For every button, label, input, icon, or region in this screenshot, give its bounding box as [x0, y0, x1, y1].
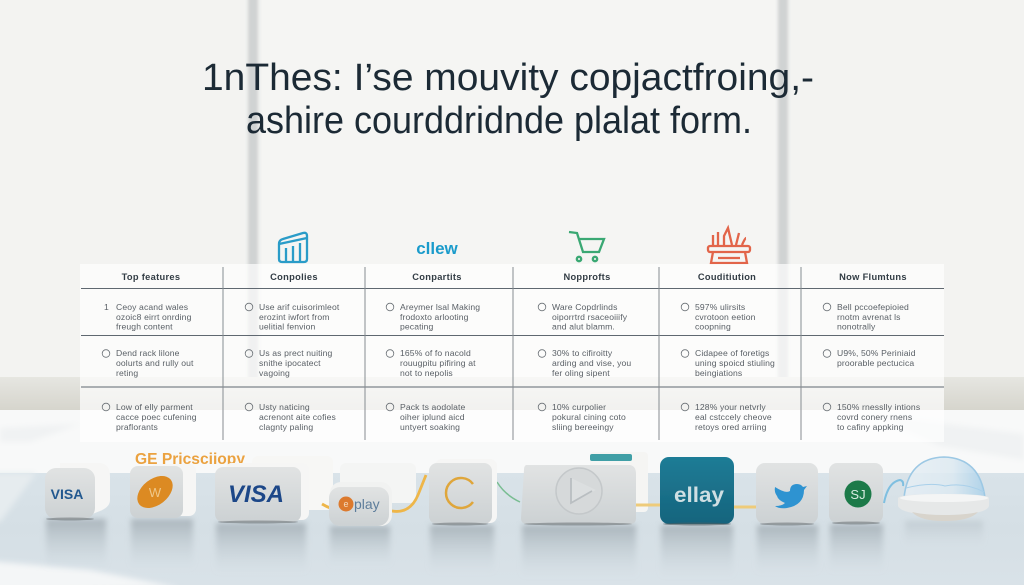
- title: 1nThes: I’se mouvity copjactfroing,-: [202, 57, 814, 99]
- column: Nopprofts: arding and vise, you: [552, 358, 631, 368]
- block: e play: [329, 482, 392, 526]
- title: [202, 57, 814, 142]
- column: Top features: Top features: [122, 272, 180, 282]
- column: Now Flumtuns: rnotm avrenat ls: [837, 312, 901, 322]
- column: Conpolies: vagoing: [259, 368, 290, 378]
- icon: glass dome on base: [898, 457, 989, 521]
- column: Couditiution: coopning: [695, 322, 731, 332]
- block: VISA small: VISA: [51, 486, 83, 502]
- title: ashire courddridnde plalat form.: [246, 100, 752, 142]
- column: Conpartits: frodoxto arlooting: [400, 312, 469, 322]
- icon: orange plant stand: [708, 228, 750, 263]
- column: Couditiution: eal cstccely cheove: [695, 412, 772, 422]
- block: VISA small: [45, 463, 110, 520]
- column: Top features: Dend rack lilone: [116, 348, 180, 358]
- column: Nopprofts: Ware Copdrlinds: [552, 302, 617, 312]
- cable: yellow connector: [636, 505, 756, 507]
- block: play button: [521, 465, 636, 526]
- column: Conpartits: Conpartits: [412, 272, 462, 282]
- column: Top features: praflorants: [116, 422, 158, 432]
- icon: bar chart: [279, 233, 307, 262]
- column: Top features: ozoic8 eirrt onrding: [116, 312, 192, 322]
- column: Couditiution: Couditiution: [698, 272, 756, 282]
- column: Now Flumtuns: 150% rnesslly intions: [837, 402, 920, 412]
- column: Conpolies: Use arif cuisorimleot: [259, 302, 340, 312]
- column: Conpolies: acrenont aite cofies: [259, 412, 336, 422]
- column: Nopprofts: [538, 272, 631, 432]
- cable: blue connector: [884, 480, 903, 503]
- block: twitter bird: [756, 463, 818, 526]
- column: Nopprofts: oiporrtrd rsaceoiiify: [552, 312, 628, 322]
- block: green S logo: [829, 463, 883, 524]
- column: Conpartits: [386, 272, 480, 432]
- label: GE Pricsciiopy: GE Pricsciiopy: [135, 451, 245, 468]
- column: Couditiution: Cidapee of foretigs: [695, 348, 769, 358]
- column: Nopprofts: pokural cining coto: [552, 412, 626, 422]
- column: Couditiution: retoys ored arriing: [695, 422, 767, 432]
- product blocks row: [45, 452, 989, 526]
- column: Conpolies: uelitial fenvion: [259, 322, 315, 332]
- block: ellay teal: [660, 457, 734, 526]
- column: Nopprofts: and alut blamm.: [552, 322, 615, 332]
- logo: cllew: cllew: [416, 239, 459, 258]
- column: Now Flumtuns: covrd conery rnens: [837, 412, 912, 422]
- column: Now Flumtuns: Bell pccoefepioied: [837, 302, 909, 312]
- block: orange leaf logo: [130, 464, 196, 518]
- column: Now Flumtuns: Now Flumtuns: [839, 272, 907, 282]
- block: VISA large: [215, 463, 309, 524]
- column: Top features: 1: [104, 302, 109, 312]
- column: Conpartits: Pack ts aodolate: [400, 402, 466, 412]
- column: Now Flumtuns: [823, 272, 920, 432]
- column: Couditiution: cvrotoon eetion: [695, 312, 756, 322]
- icon: shopping cart: [569, 232, 604, 261]
- block: orange leaf logo: W: [149, 485, 162, 500]
- column: Conpolies: erozint iwfort from: [259, 312, 330, 322]
- column: Top features: Low of elly parment: [116, 402, 193, 412]
- block: e play: play: [354, 496, 380, 512]
- column: Couditiution: 597% ulirsits: [695, 302, 745, 312]
- column: Nopprofts: 10% curpolier: [552, 402, 606, 412]
- block: ellay teal: ellay: [674, 484, 724, 507]
- column: Now Flumtuns: nonotrally: [837, 322, 876, 332]
- panel: comparison table: [80, 264, 944, 442]
- column: Top features: cacce poec cufening: [116, 412, 197, 422]
- block: letter C: [429, 459, 497, 526]
- column: Top features: oolurts and rully out: [116, 358, 194, 368]
- block: back white blocks: [252, 456, 416, 510]
- column: Now Flumtuns: U9%, 50% Periniaid: [837, 348, 916, 358]
- column: Nopprofts: fer oling sipent: [552, 368, 610, 378]
- cable: orange connector: [322, 475, 426, 513]
- cable: green connector: [497, 482, 520, 502]
- column: Nopprofts: Nopprofts: [563, 272, 611, 282]
- column: Top features: reting: [116, 368, 138, 378]
- column: Couditiution: uning spoicd stiuling: [695, 358, 775, 368]
- column: Conpolies: [245, 272, 340, 432]
- column: Couditiution: beingiations: [695, 368, 742, 378]
- column: Top features: [102, 272, 197, 432]
- column: Couditiution: 128% your netvrly: [695, 402, 766, 412]
- column: Conpolies: clagnty paling: [259, 422, 313, 432]
- column: Nopprofts: 30% to cifiroitty: [552, 348, 613, 358]
- block: teal back piece: [590, 452, 648, 512]
- block: VISA large: VISA: [228, 481, 284, 508]
- column: Top features: freugh content: [116, 322, 173, 332]
- column: Conpartits: 165% of fo nacold: [400, 348, 471, 358]
- column: Conpartits: not to nepolis: [400, 368, 453, 378]
- column: Now Flumtuns: proorable pectucica: [837, 358, 914, 368]
- block: e play: e: [343, 499, 349, 509]
- column: Conpartits: untyert soaking: [400, 422, 460, 432]
- column: Nopprofts: sliing bereeingy: [552, 422, 614, 432]
- column: Conpolies: Us as prect nuiting: [259, 348, 333, 358]
- column: Conpolies: Usty naticing: [259, 402, 310, 412]
- block: green S logo: SJ: [850, 487, 866, 502]
- column: Conpartits: oiher iplund aicd: [400, 412, 465, 422]
- column: Now Flumtuns: to cafiny appking: [837, 422, 904, 432]
- column: Couditiution: [681, 272, 775, 432]
- column: Conpartits: pecating: [400, 322, 434, 332]
- column: Conpartits: rouugpitu pifiring at: [400, 358, 476, 368]
- column: Conpolies: Conpolies: [270, 272, 318, 282]
- floor reflections: [46, 519, 983, 577]
- column: Conpolies: snithe ipocatect: [259, 358, 321, 368]
- column: Conpartits: Areymer lsal Making: [400, 302, 480, 312]
- column: Top features: Ceoy acand wales: [116, 302, 188, 312]
